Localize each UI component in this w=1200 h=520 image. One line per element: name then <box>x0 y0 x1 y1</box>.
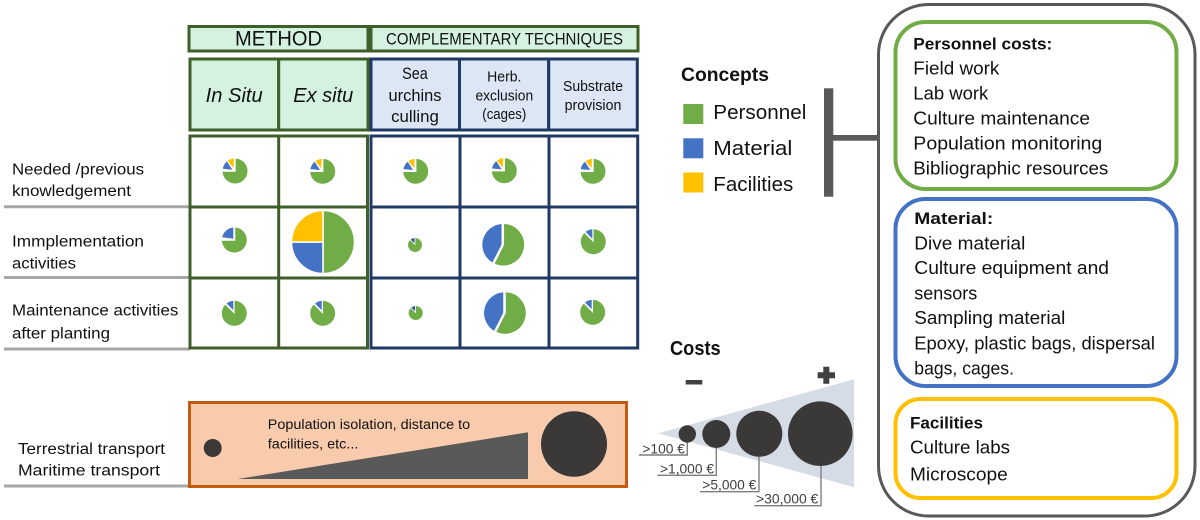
pie: maintenance, substrate <box>580 300 605 325</box>
pie: maintenance, in situ <box>222 301 247 326</box>
cost labels: >1,000 € <box>660 461 714 476</box>
pie: implementation, herbivore exclusion <box>482 223 525 266</box>
transport labels <box>4 441 190 486</box>
pie: implementation, substrate <box>581 229 606 254</box>
panel: personnel costs: Bibliographic resources <box>913 158 1108 178</box>
legend: concepts: Personnel <box>713 101 806 124</box>
text: isolation note: Population isolation, distance to <box>268 417 470 432</box>
panel: personnel costs: Population monitoring <box>913 133 1102 153</box>
row labels with underlines: Immplementation <box>12 234 144 251</box>
pie: knowledge, sea urchins <box>403 159 428 184</box>
legend: concepts: Facilities <box>713 173 793 196</box>
panel: personnel costs: Lab work <box>913 83 989 103</box>
column headers: complementary techniques: exclusion <box>475 89 533 105</box>
panel: facilities: Facilities <box>910 413 983 432</box>
column headers: complementary techniques <box>371 59 637 130</box>
cost grid: complementary techniques <box>371 136 638 348</box>
panel: material: Material: <box>914 209 993 228</box>
pie: implementation, in situ <box>222 228 247 252</box>
panel: facilities <box>896 399 1176 498</box>
row labels with underlines: Maintenance activities <box>12 303 179 320</box>
pie: knowledge, ex situ <box>310 159 335 184</box>
icon: large circle <box>541 411 607 477</box>
cost labels: >100 € <box>642 441 685 456</box>
column headers: complementary techniques: Sea <box>402 65 429 83</box>
panel: personnel costs <box>896 22 1176 189</box>
row labels with underlines: after planting <box>12 325 110 342</box>
column headers: methods: In Situ <box>206 85 263 107</box>
panel: transport gradient <box>190 402 626 486</box>
row labels with underlines <box>4 161 190 349</box>
wedge: scale <box>658 379 854 487</box>
pie: knowledge, substrate <box>581 159 606 184</box>
cost circles <box>679 401 853 466</box>
panel: material: Sampling material <box>914 308 1065 328</box>
icon: minus <box>686 380 702 384</box>
pie: knowledge, in situ <box>223 159 248 184</box>
heading: method: METHOD <box>235 28 322 51</box>
transport labels: Terrestrial transport <box>18 441 166 458</box>
cost labels: >30,000 € <box>756 491 819 506</box>
cost labels <box>642 441 819 506</box>
column headers: complementary techniques: provision <box>565 98 621 114</box>
pie: implementation, sea urchins <box>408 238 422 252</box>
heading: complementary techniques: COMPLEMENTARY TECHNIQUES <box>386 30 623 48</box>
column headers: complementary techniques: Herb. <box>487 70 521 86</box>
column headers: complementary techniques: urchins <box>388 87 442 105</box>
transport labels: Maritime transport <box>18 463 161 480</box>
panel: material: Epoxy, plastic bags, dispersal <box>914 333 1155 353</box>
panel: personnel costs: Culture maintenance <box>913 108 1090 128</box>
panel: material: bags, cages. <box>914 358 1014 378</box>
panel: material: sensors <box>914 283 977 303</box>
text: isolation note <box>268 417 470 451</box>
column headers: methods: Ex situ <box>293 85 353 107</box>
cost leader lines <box>639 440 821 506</box>
legend: concepts: Concepts <box>681 64 769 86</box>
cost grid: methods <box>190 136 368 348</box>
icon: small circle <box>204 439 222 457</box>
pie: knowledge, herbivore exclusion <box>492 158 517 183</box>
panel: facilities: Microscope <box>910 465 1008 485</box>
column headers: complementary techniques: culling <box>391 108 439 126</box>
panel: cost categories <box>878 4 1195 516</box>
panel: facilities: Culture labs <box>910 437 1010 457</box>
cost labels: >5,000 € <box>702 477 757 492</box>
row labels with underlines: Needed /previous <box>12 161 144 178</box>
column headers: complementary techniques: (cages) <box>482 107 526 123</box>
row labels with underlines: knowledgement <box>12 183 132 200</box>
wedge: rising cost <box>238 432 528 479</box>
text: isolation note: facilities, etc... <box>268 436 358 451</box>
legend: concepts: Material <box>713 137 792 160</box>
panel: material: Culture equipment and <box>914 258 1109 278</box>
costs scale <box>639 338 854 506</box>
heading: complementary techniques <box>371 26 638 51</box>
icon: plus <box>818 367 835 384</box>
pie: maintenance, sea urchins <box>409 306 423 320</box>
row labels with underlines: activities <box>12 255 76 272</box>
column headers: complementary techniques: Substrate <box>563 79 623 95</box>
heading: method <box>189 26 368 51</box>
column headers: methods <box>190 59 368 130</box>
panel: personnel costs: Personnel costs: <box>913 34 1052 53</box>
panel: personnel costs: Field work <box>913 59 1000 79</box>
panel: material: Dive material <box>914 233 1025 253</box>
connector bracket <box>824 88 879 197</box>
pie: maintenance, herbivore exclusion <box>483 292 527 334</box>
legend: concepts <box>681 64 806 196</box>
panel: material <box>896 199 1176 386</box>
pie: maintenance, ex situ <box>310 301 335 326</box>
costs scale: Costs <box>670 338 721 360</box>
pie: implementation, ex situ <box>292 210 354 274</box>
